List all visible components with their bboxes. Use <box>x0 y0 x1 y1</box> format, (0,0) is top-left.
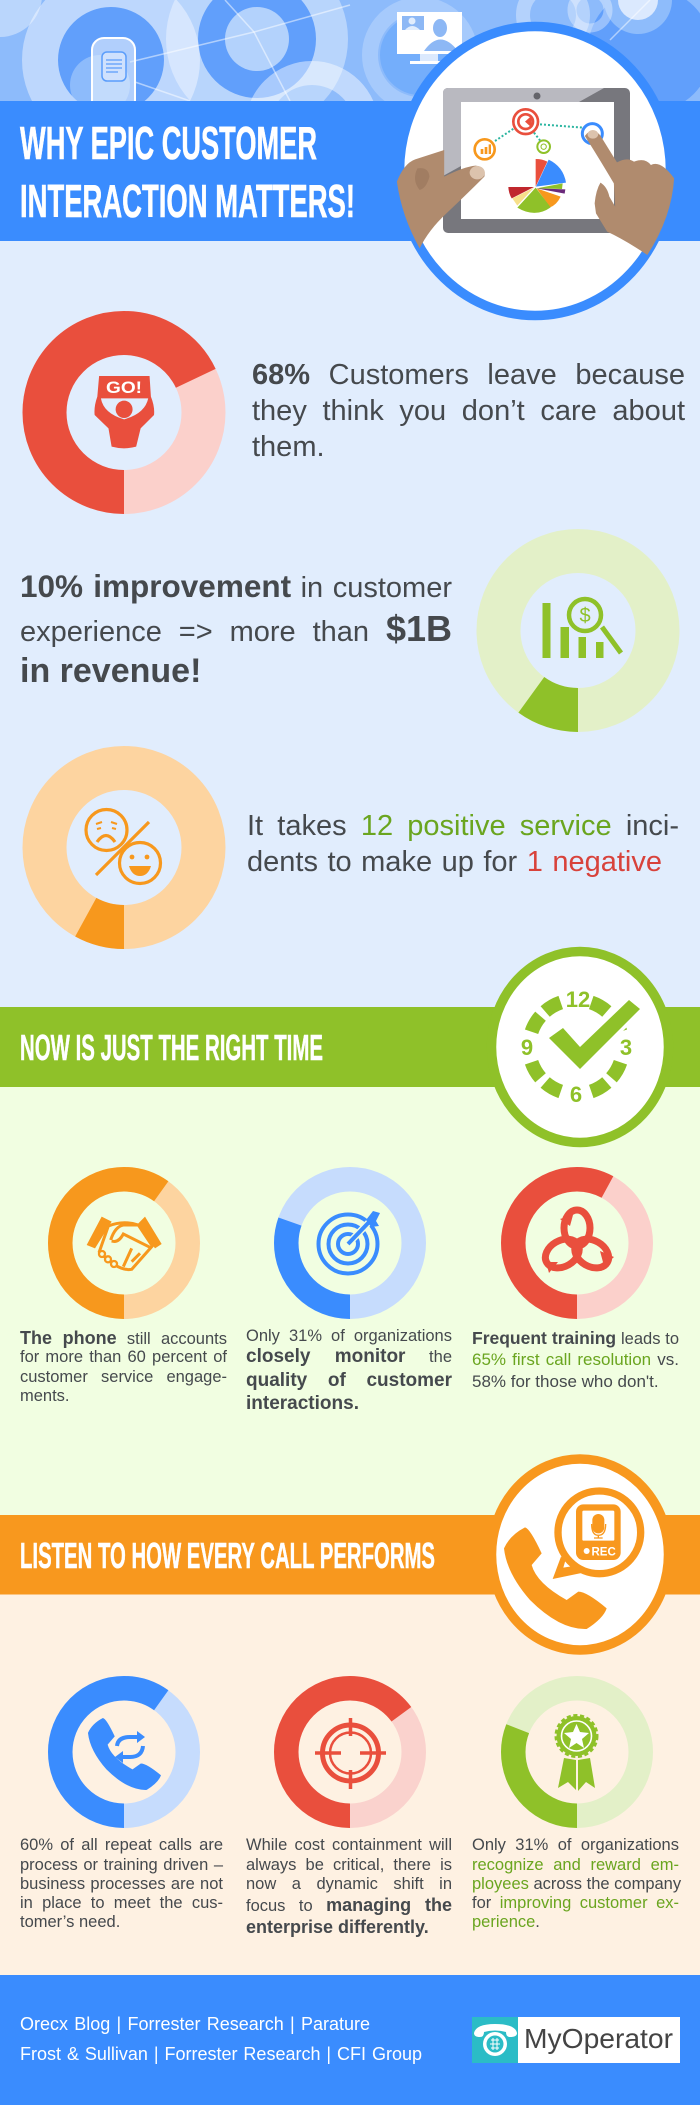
donut: repeat calls <box>60 1688 188 1816</box>
text: recognize and reward: ployees across the company <box>472 1875 681 1893</box>
logo: MyOperator <box>472 2017 680 2063</box>
text: the phone: for more than 60 percent of <box>20 1348 227 1366</box>
text: 10 percent improvement revenue: experience => more than $1B <box>20 608 452 648</box>
icon: crosshair <box>315 1718 386 1789</box>
text: 10 percent improvement revenue: in revenue! <box>20 652 201 690</box>
text: repeat calls: tomer’s need. <box>20 1913 120 1931</box>
tablet <box>443 88 630 233</box>
text: cost containment: now a dynamic shift in <box>246 1875 452 1893</box>
text: 68 percent of customers leave: they think you don’t care about <box>252 395 685 427</box>
orange section band <box>0 1515 700 1594</box>
icon: clock with check mark: 12 <box>566 987 590 1012</box>
title: INTERACTION MATTERS! <box>20 175 355 227</box>
text: recognize and reward <box>472 1836 682 1931</box>
header background pattern with document and monitor icons <box>0 0 700 101</box>
donut: 68 percent <box>44 333 204 492</box>
tablet chart: nodes and pie <box>475 109 602 213</box>
icon: phone and recording bubble <box>492 1459 668 1650</box>
icon: sad and happy percent faces <box>86 810 160 884</box>
icon: phone and recording bubble: REC <box>592 1546 616 1558</box>
donut: 10 percent <box>498 551 658 710</box>
text: repeat calls: process or training driven – <box>20 1856 223 1874</box>
text: 68 percent of customers leave: 68% Customers leave because <box>252 359 685 391</box>
donut: training <box>513 1179 641 1307</box>
text: frequent training: 65% first call resolution vs. <box>472 1350 679 1369</box>
icon: revenue chart with magnifier <box>542 599 621 658</box>
text: repeat calls: 60% of all repeat calls are <box>20 1836 223 1854</box>
text: cost containment: enterprise differently. <box>246 1916 429 1936</box>
logo: MyOperator: MyOperator <box>524 2023 673 2054</box>
donut: cost containment <box>286 1688 414 1816</box>
text: the phone: customer service engage- <box>20 1368 227 1386</box>
donut: 12 to 1 incidents <box>44 768 204 927</box>
icon: handshake <box>87 1217 162 1270</box>
hands <box>397 130 674 255</box>
text: frequent training <box>472 1328 679 1391</box>
header illustration: tablet with hands <box>397 26 674 316</box>
text: repeat calls: in place to meet the cus- <box>20 1894 223 1912</box>
donut: reward employees <box>513 1688 641 1816</box>
text: cost containment: always be critical, there is <box>246 1856 452 1874</box>
title <box>20 117 355 227</box>
text: the phone: ments. <box>20 1387 70 1405</box>
text: repeat calls <box>20 1836 224 1931</box>
icon: go sign <box>94 376 154 448</box>
text: closely monitor: interactions. <box>246 1393 359 1414</box>
icon: clock with check mark: 9 <box>521 1035 533 1060</box>
section heading: right time: NOW IS JUST THE RIGHT TIME <box>20 1027 323 1068</box>
icon: award ribbon <box>556 1716 596 1791</box>
text: closely monitor <box>246 1327 452 1414</box>
footer band <box>0 1975 700 2105</box>
icon: clock with check mark: 3 <box>620 1035 632 1060</box>
text: the phone <box>20 1328 227 1405</box>
donut: monitor quality <box>286 1179 414 1307</box>
text: closely monitor: closely monitor the <box>246 1346 452 1367</box>
text: recognize and reward: perience. <box>472 1913 540 1931</box>
icon: clock with check mark <box>492 952 668 1142</box>
text: cost containment: While cost containment will <box>246 1836 452 1854</box>
footer sources <box>20 2014 422 2064</box>
text: recognize and reward: Only 31% of organizations <box>472 1836 679 1854</box>
green section band <box>0 1007 700 1087</box>
text: 68 percent of customers leave <box>252 359 685 463</box>
footer sources: Orecx Blog | Forrester Research | Parature <box>20 2014 370 2034</box>
text: 10 percent improvement revenue: 10% improvement in customer <box>20 568 452 604</box>
text: 12 positive incidents: dents to make up for 1 negative <box>247 846 662 878</box>
text: 68 percent of customers leave: them. <box>252 431 325 463</box>
text: cost containment: focus to managing the <box>246 1895 452 1915</box>
text: cost containment <box>246 1836 452 1937</box>
text: 10 percent improvement revenue <box>20 568 452 690</box>
text: 12 positive incidents <box>247 810 679 878</box>
text: frequent training: Frequent training leads to <box>472 1328 679 1348</box>
title: WHY EPIC CUSTOMER <box>20 117 317 169</box>
icon: target with arrow <box>318 1211 380 1274</box>
footer sources: Frost & Sullivan | Forrester Research | CFI Group <box>20 2044 422 2064</box>
text: frequent training: 58% for those who don't. <box>472 1372 659 1391</box>
header band <box>0 101 700 241</box>
text: recognize and reward: for improving customer ex- <box>472 1894 679 1912</box>
text: closely monitor: quality of customer <box>246 1370 452 1391</box>
icon: revenue chart with magnifier: $ <box>579 605 591 627</box>
icon: looping arrows knot <box>540 1210 614 1274</box>
icon: video call monitor <box>397 12 462 64</box>
icon: go sign: GO! <box>106 378 142 397</box>
text: recognize and reward: recognize and reward em- <box>472 1856 679 1874</box>
text: 12 positive incidents: It takes 12 positive service inci- <box>247 810 679 842</box>
donut: phone engagements <box>60 1179 188 1307</box>
icon: phone with repeat arrows <box>88 1718 161 1790</box>
text: the phone: The phone still accounts <box>20 1328 227 1348</box>
text: repeat calls: business processes are not <box>20 1875 223 1893</box>
icon: document in phone <box>92 38 135 112</box>
icon: clock with check mark: 6 <box>570 1082 582 1107</box>
text: closely monitor: Only 31% of organizations <box>246 1327 452 1345</box>
